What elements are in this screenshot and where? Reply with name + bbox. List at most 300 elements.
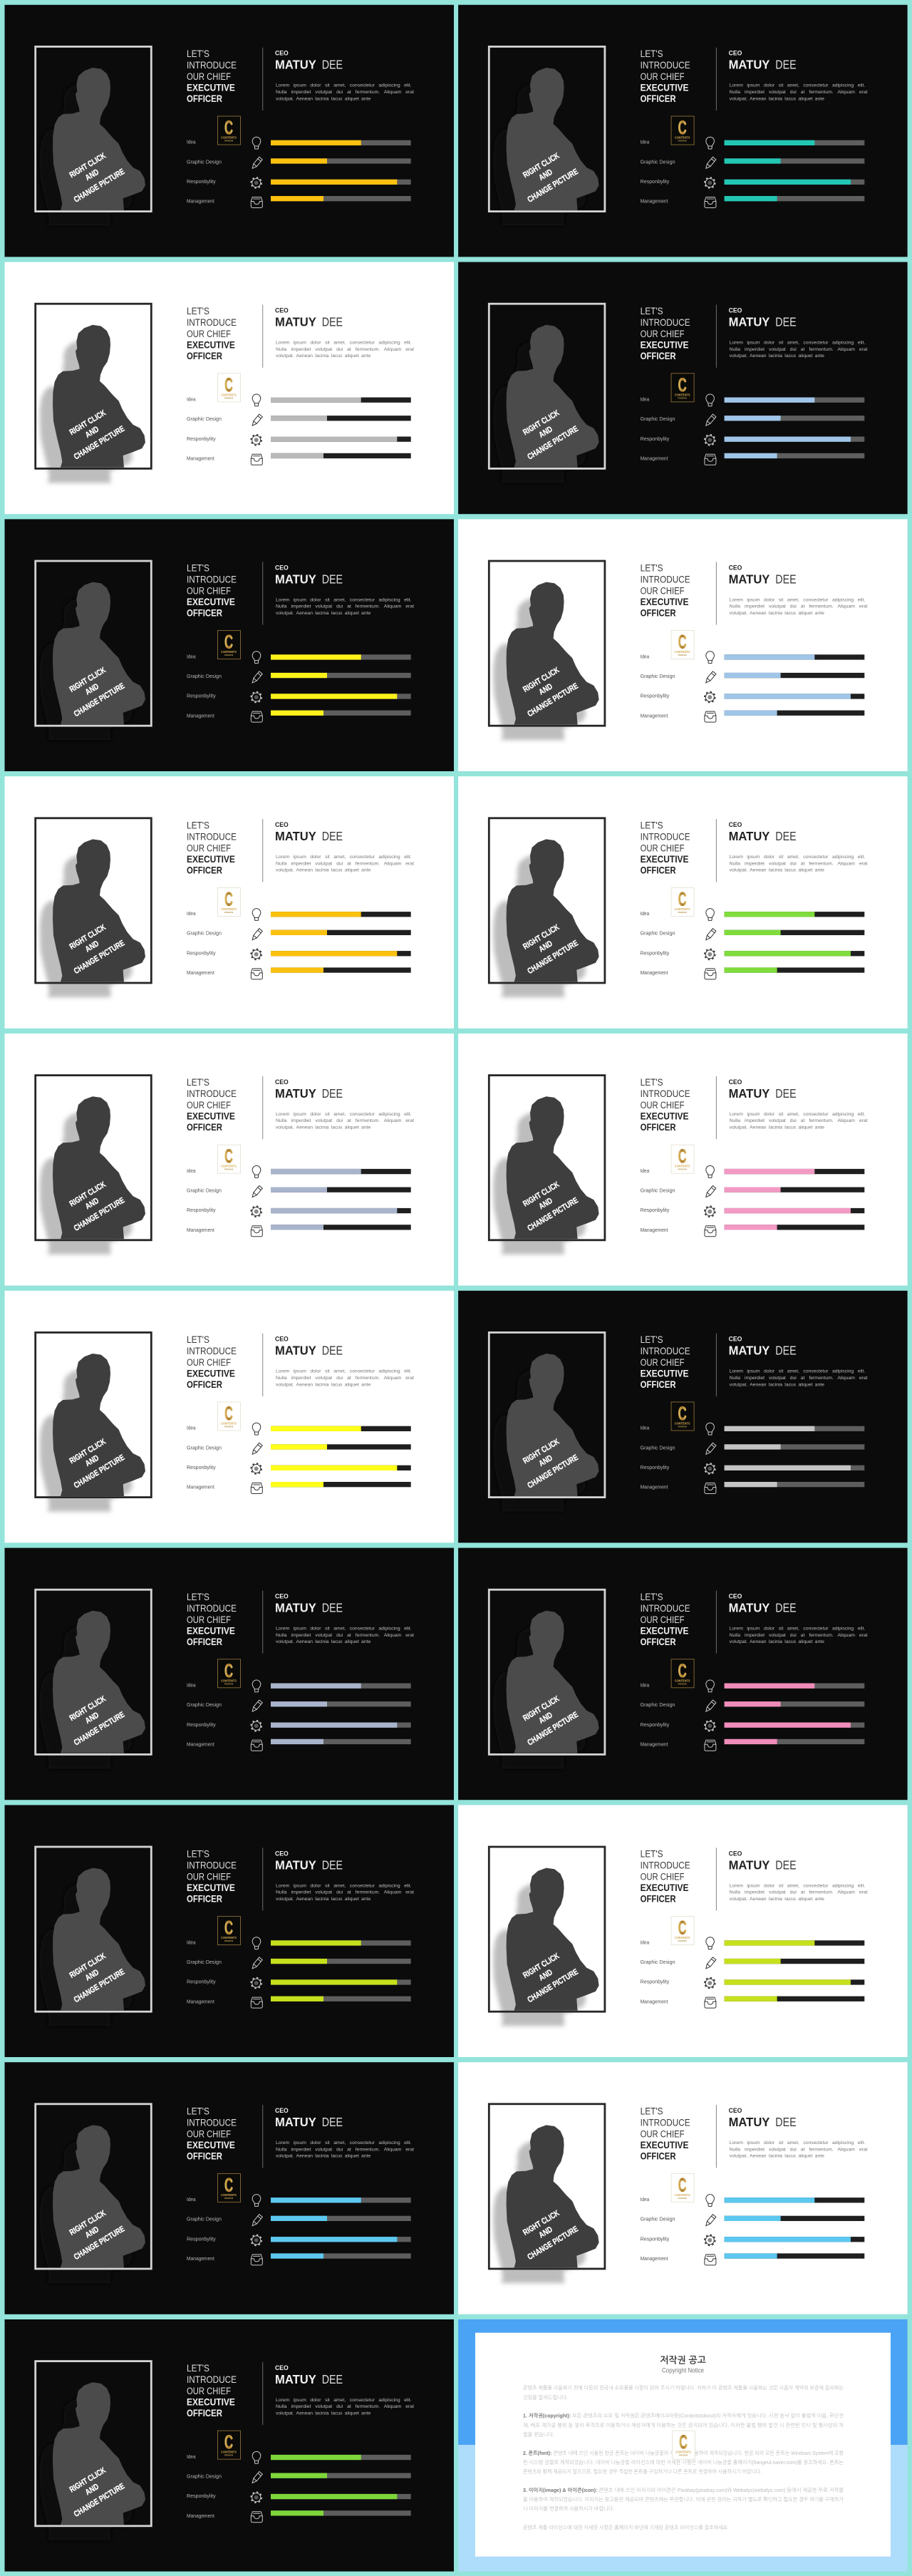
- name block: CEO: [275, 821, 289, 828]
- photo frame with silhouette: AND: [538, 2225, 554, 2240]
- bio text: Lorem ipsum dolor sit amet, consectetur adipiscing elit.: [730, 1112, 865, 1117]
- heading: EXECUTIVE: [641, 1111, 689, 1122]
- skill labels: Graphic Design: [187, 930, 222, 937]
- logo badge: [218, 1402, 241, 1431]
- logo badge: CONTENTS: [675, 2193, 690, 2197]
- skill labels: Idea: [187, 2198, 196, 2203]
- heading: OFFICER: [641, 351, 676, 361]
- bio text: Lorem ipsum dolor sit amet, consectetur adipiscing elit.: [730, 855, 865, 860]
- heading: OUR CHIEF: [641, 329, 685, 339]
- name block: [275, 1335, 343, 1358]
- bio text: Nulla imperdiet volutpat dui at fermentum. Aliquam erat: [276, 1890, 414, 1895]
- photo frame with silhouette: AND: [84, 168, 101, 182]
- logo badge: [671, 1659, 694, 1688]
- photo frame with silhouette: [36, 818, 151, 997]
- heading: INTRODUCE: [641, 60, 690, 71]
- name block: [275, 821, 343, 844]
- name block: DEE: [322, 315, 343, 329]
- bio text: volutpat. Aenean lacinia lacus aliquet ante: [730, 2154, 824, 2159]
- skill labels: Management: [187, 1227, 214, 1233]
- photo frame with silhouette: AND: [538, 1197, 554, 1212]
- heading: INTRODUCE: [641, 2118, 690, 2128]
- photo frame with silhouette: [36, 1332, 151, 1512]
- logo badge: [218, 887, 241, 916]
- logo badge: [671, 1145, 694, 1173]
- logo badge: [218, 631, 241, 659]
- skill labels: [187, 912, 222, 976]
- logo badge: [671, 1917, 694, 1945]
- skill labels: [187, 2198, 222, 2262]
- skill bars: [725, 398, 864, 458]
- logo badge: [218, 116, 241, 145]
- skill labels: Management: [187, 2256, 214, 2262]
- photo frame with silhouette: AND: [84, 682, 101, 697]
- skill bars: [725, 1426, 864, 1487]
- photo frame with silhouette: CHANGE PICTURE: [73, 1196, 126, 1233]
- bio text: volutpat. Aenean lacinia lacus aliquet ante: [730, 1897, 824, 1902]
- copyright body text: 1. 저작권(copyright): 모든 콘텐츠의 소유 및 저작권은 콘텐츠메이크아웃(Contentstokout)의 저작자에게 있습니다. 사전 승낙 없이 불법적 이용, 무단전: [523, 2412, 844, 2419]
- skill labels: Graphic Design: [641, 673, 675, 679]
- logo badge: CONTENTS: [221, 907, 237, 911]
- photo frame with silhouette: [36, 1590, 151, 1768]
- logo badge: CONTENTS: [221, 2193, 237, 2197]
- name block: MATUY: [275, 1858, 316, 1872]
- skill labels: Management: [641, 713, 668, 718]
- photo frame with silhouette: [489, 2104, 605, 2283]
- skill labels: [187, 1940, 222, 2004]
- logo badge: PREMIUM: [678, 140, 687, 143]
- skill labels: Graphic Design: [641, 158, 675, 165]
- name block: DEE: [322, 2116, 343, 2130]
- logo badge: PREMIUM: [224, 1939, 233, 1942]
- logo badge: CONTENTS: [675, 393, 690, 396]
- heading: EXECUTIVE: [187, 2396, 235, 2408]
- photo frame with silhouette: [489, 818, 605, 997]
- heading: INTRODUCE: [187, 832, 237, 843]
- name block: DEE: [322, 1344, 343, 1358]
- bio text: [730, 1627, 868, 1644]
- logo badge: C: [224, 1917, 233, 1939]
- skill labels: [187, 140, 222, 205]
- skill labels: [641, 397, 675, 462]
- photo frame with silhouette: AND: [84, 1711, 101, 1726]
- bio text: Lorem ipsum dolor sit amet, consectetur adipiscing elit.: [730, 1627, 865, 1632]
- name block: [729, 1850, 797, 1872]
- bio text: volutpat. Aenean lacinia lacus aliquet ante: [730, 868, 824, 873]
- heading: LET'S: [641, 1592, 663, 1602]
- photo frame with silhouette: CHANGE PICTURE: [527, 939, 580, 976]
- bio text: Nulla imperdiet volutpat dui at fermentum. Aliquam erat: [276, 2404, 414, 2409]
- skill labels: Responbylity: [641, 1207, 670, 1213]
- logo badge: PREMIUM: [224, 654, 233, 656]
- skill labels: Responbylity: [641, 692, 670, 699]
- logo badge: PREMIUM: [678, 2197, 687, 2200]
- bio text: Lorem ipsum dolor sit amet, consectetur adipiscing elit.: [276, 83, 412, 88]
- name block: MATUY: [275, 1343, 316, 1358]
- heading: [641, 1078, 690, 1133]
- heading: OUR CHIEF: [187, 2128, 231, 2140]
- photo frame with silhouette: CHANGE PICTURE: [73, 2225, 126, 2262]
- skill icons: [705, 909, 716, 979]
- logo badge: CONTENTS: [221, 1936, 237, 1939]
- skill labels: [641, 1940, 675, 2004]
- photo frame with silhouette: AND: [538, 1454, 554, 1468]
- heading: OUR CHIEF: [187, 1100, 231, 1111]
- heading: [187, 1849, 237, 1905]
- logo badge: [673, 2431, 695, 2459]
- panel: slide 19, dark, green bars: [4, 2319, 454, 2572]
- photo frame with silhouette: RIGHT CLICK: [68, 923, 108, 952]
- name block: [275, 564, 343, 587]
- skill bars: [725, 140, 864, 201]
- bio text: Nulla imperdiet volutpat dui at fermentum. Aliquam erat: [730, 604, 868, 609]
- name block: [729, 306, 797, 329]
- heading: LET'S: [187, 820, 209, 831]
- heading: OFFICER: [187, 1379, 222, 1390]
- heading: LET'S: [641, 306, 663, 316]
- heading: INTRODUCE: [187, 317, 237, 328]
- logo badge: [218, 373, 241, 402]
- panel: slide 4, dark, pale blue bars: [458, 262, 908, 514]
- heading: INTRODUCE: [641, 1346, 690, 1356]
- panel: slide 2, dark, teal bars: [458, 5, 908, 257]
- photo frame with silhouette: RIGHT CLICK: [522, 923, 561, 952]
- logo badge: C: [224, 2431, 233, 2453]
- heading: OUR CHIEF: [641, 1357, 685, 1368]
- name block: CEO: [729, 49, 742, 57]
- name block: [729, 49, 797, 72]
- skill icons: [251, 909, 262, 979]
- heading: LET'S: [187, 2364, 209, 2374]
- heading: [187, 306, 237, 361]
- heading: LET'S: [641, 820, 663, 831]
- heading: INTRODUCE: [641, 832, 690, 843]
- bio text: [730, 1369, 868, 1387]
- heading: OFFICER: [641, 93, 676, 104]
- bio text: Lorem ipsum dolor sit amet, consectetur adipiscing elit.: [276, 1883, 412, 1888]
- logo badge: PREMIUM: [224, 1168, 233, 1171]
- skill labels: Graphic Design: [187, 158, 222, 165]
- bio text: Lorem ipsum dolor sit amet, consectetur adipiscing elit.: [730, 597, 865, 602]
- bio text: Lorem ipsum dolor sit amet, consectetur adipiscing elit.: [276, 2398, 412, 2403]
- logo badge: CONTENTS: [221, 1421, 237, 1426]
- name block: CEO: [729, 1335, 742, 1343]
- bio text: Nulla imperdiet volutpat dui at fermentum. Aliquam erat: [730, 1118, 868, 1123]
- photo frame with silhouette: [36, 1076, 151, 1254]
- panel: slide 3, light, grey bars: [4, 262, 454, 514]
- name block: MATUY: [275, 572, 316, 586]
- name block: DEE: [322, 58, 343, 72]
- heading: [187, 48, 237, 104]
- heading: OFFICER: [641, 1894, 676, 1905]
- panel: slide 10, light, pink bars: [458, 1034, 908, 1286]
- heading: LET'S: [641, 2106, 663, 2117]
- heading: EXECUTIVE: [187, 1368, 235, 1379]
- name block: MATUY: [729, 829, 770, 843]
- photo frame with silhouette: RIGHT CLICK: [68, 1694, 108, 1723]
- logo badge: PREMIUM: [224, 2454, 233, 2457]
- bio text: Nulla imperdiet volutpat dui at fermentum. Aliquam erat: [730, 1633, 868, 1638]
- bio text: volutpat. Aenean lacinia lacus aliquet ante: [276, 354, 371, 359]
- name block: CEO: [729, 1592, 742, 1600]
- bio text: volutpat. Aenean lacinia lacus aliquet ante: [730, 611, 824, 616]
- skill bars: [725, 912, 864, 973]
- heading: OUR CHIEF: [641, 843, 685, 854]
- bio text: Nulla imperdiet volutpat dui at fermentum. Aliquam erat: [276, 1633, 414, 1638]
- logo badge: PREMIUM: [224, 396, 233, 399]
- heading: LET'S: [187, 2106, 209, 2117]
- skill labels: Management: [641, 1227, 668, 1233]
- heading: LET'S: [641, 1078, 663, 1088]
- skill icons: [705, 394, 716, 465]
- bio text: [276, 1112, 414, 1130]
- logo badge: PREMIUM: [678, 911, 687, 914]
- skill labels: [187, 397, 222, 462]
- logo badge: [218, 2431, 241, 2459]
- heading: OUR CHIEF: [641, 2128, 685, 2140]
- name block: DEE: [775, 1086, 797, 1101]
- skill icons: [251, 1680, 262, 1751]
- logo badge: [218, 2173, 241, 2202]
- photo frame with silhouette: RIGHT CLICK: [68, 1438, 108, 1466]
- heading: [641, 1849, 690, 1905]
- name block: CEO: [729, 306, 742, 314]
- logo badge: CONTENTS: [675, 1421, 690, 1426]
- bio text: volutpat. Aenean lacinia lacus aliquet ante: [276, 2411, 371, 2416]
- name block: DEE: [775, 58, 797, 72]
- name block: CEO: [729, 1078, 742, 1086]
- bio text: Nulla imperdiet volutpat dui at fermentum. Aliquam erat: [730, 1376, 868, 1381]
- panel: slide 18, light, sky blue bars: [458, 2062, 908, 2314]
- heading: OUR CHIEF: [187, 2386, 231, 2396]
- bio text: [276, 341, 414, 359]
- name block: CEO: [729, 2107, 742, 2114]
- bio text: volutpat. Aenean lacinia lacus aliquet ante: [276, 1382, 371, 1387]
- skill labels: Management: [641, 970, 668, 976]
- logo badge: C: [224, 117, 233, 138]
- bio text: Lorem ipsum dolor sit amet, consectetur adipiscing elit.: [276, 1369, 412, 1374]
- skill bars: [725, 1940, 864, 2001]
- skill labels: Responbylity: [641, 1464, 670, 1470]
- bio text: Lorem ipsum dolor sit amet, consectetur adipiscing elit.: [276, 2140, 412, 2145]
- skill labels: Graphic Design: [641, 930, 675, 937]
- photo frame with silhouette: [489, 1847, 605, 2026]
- name block: CEO: [275, 49, 289, 57]
- name block: DEE: [775, 1344, 797, 1358]
- skill bars: [271, 140, 411, 201]
- skill labels: Management: [641, 455, 668, 462]
- name block: CEO: [275, 1078, 289, 1086]
- photo frame with silhouette: CHANGE PICTURE: [527, 1453, 580, 1490]
- heading: OUR CHIEF: [187, 586, 231, 597]
- panel: slide 14, dark, pink bars: [458, 1548, 908, 1800]
- logo badge: C: [678, 1403, 687, 1424]
- name block: MATUY: [275, 829, 316, 843]
- skill labels: [187, 2455, 222, 2519]
- skill labels: Idea: [641, 140, 649, 145]
- name block: [275, 1078, 343, 1101]
- logo badge: PREMIUM: [678, 1682, 687, 1685]
- heading: OFFICER: [187, 2408, 222, 2418]
- panel: slide 5, dark, yellow bars: [4, 519, 454, 771]
- copyright title: 저작권 공고: [660, 2355, 706, 2366]
- skill labels: Graphic Design: [187, 673, 222, 679]
- bio text: [730, 1883, 868, 1902]
- name block: DEE: [775, 2116, 797, 2130]
- heading: [641, 563, 690, 619]
- name block: MATUY: [729, 1343, 770, 1358]
- name block: CEO: [275, 306, 289, 314]
- copyright body text: 된 시스템 글꼴로 제작되었습니다. 네이버 나눔글꼴 라이선스에 대한 자세한 사항은 네이버 나눔글꼴 홈페이지(hangeul.naver.com)를 참조하세요. 폰트는: [523, 2459, 844, 2466]
- logo badge: C: [224, 1403, 233, 1424]
- bio text: [276, 1883, 414, 1902]
- photo frame with silhouette: [489, 561, 605, 740]
- bio text: volutpat. Aenean lacinia lacus aliquet ante: [276, 1897, 371, 1902]
- bio text: [730, 597, 868, 616]
- skill labels: [641, 1683, 675, 1748]
- skill labels: Idea: [641, 1683, 649, 1689]
- skill labels: Management: [641, 198, 668, 205]
- heading: INTRODUCE: [187, 1089, 237, 1099]
- skill icons: [251, 137, 262, 208]
- skill labels: Graphic Design: [187, 1701, 222, 1708]
- heading: LET'S: [641, 48, 663, 59]
- photo frame with silhouette: RIGHT CLICK: [68, 1180, 108, 1209]
- heading: INTRODUCE: [187, 575, 237, 585]
- bio text: [276, 2398, 414, 2416]
- photo frame with silhouette: AND: [84, 939, 101, 954]
- bio text: volutpat. Aenean lacinia lacus aliquet ante: [276, 1639, 371, 1644]
- name block: DEE: [775, 1858, 797, 1872]
- bio text: [730, 2140, 868, 2159]
- skill icons: [705, 137, 716, 208]
- photo frame with silhouette: RIGHT CLICK: [522, 1180, 561, 1209]
- skill labels: Graphic Design: [641, 1444, 675, 1451]
- name block: CEO: [275, 1850, 289, 1857]
- photo frame with silhouette: RIGHT CLICK: [68, 2466, 108, 2495]
- photo frame with silhouette: CHANGE PICTURE: [527, 682, 580, 719]
- heading: EXECUTIVE: [187, 1111, 235, 1122]
- bio text: Lorem ipsum dolor sit amet, consectetur adipiscing elit.: [276, 597, 412, 602]
- skill labels: Idea: [187, 140, 196, 145]
- name block: CEO: [729, 1850, 742, 1857]
- skill bars: [271, 1169, 411, 1230]
- heading: OFFICER: [641, 1122, 676, 1133]
- skill labels: Responbylity: [187, 692, 216, 699]
- name block: DEE: [775, 830, 797, 844]
- heading: OUR CHIEF: [641, 1614, 685, 1625]
- logo badge: [218, 1917, 241, 1945]
- skill labels: Responbylity: [187, 2235, 216, 2242]
- panel: slide 13, dark, blue-grey bars: [4, 1548, 454, 1800]
- logo badge: [671, 1402, 694, 1431]
- bio text: [730, 1112, 868, 1130]
- heading: INTRODUCE: [641, 575, 690, 585]
- panel: slide 16, light, lime bars: [458, 1805, 908, 2057]
- photo frame with silhouette: [36, 46, 151, 226]
- skill bars: [271, 1940, 411, 2001]
- heading: INTRODUCE: [641, 1860, 690, 1871]
- photo frame with silhouette: AND: [538, 1968, 554, 1983]
- name block: CEO: [275, 564, 289, 571]
- bio text: Lorem ipsum dolor sit amet, consectetur adipiscing elit.: [730, 340, 865, 345]
- skill bars: [725, 654, 864, 716]
- logo badge: C: [224, 1660, 233, 1681]
- heading: EXECUTIVE: [641, 596, 689, 607]
- heading: EXECUTIVE: [187, 1882, 235, 1893]
- logo badge: C: [678, 888, 687, 910]
- bio text: [276, 855, 414, 873]
- photo frame with silhouette: [489, 1590, 605, 1768]
- logo badge: PREMIUM: [678, 654, 687, 656]
- bio text: volutpat. Aenean lacinia lacus aliquet ante: [276, 1125, 371, 1130]
- name block: CEO: [729, 821, 742, 828]
- skill icons: [705, 1937, 716, 2008]
- skill bars: [271, 912, 411, 973]
- skill labels: Idea: [641, 2198, 649, 2203]
- heading: LET'S: [641, 1849, 663, 1860]
- heading: INTRODUCE: [187, 1346, 237, 1356]
- bio text: [730, 855, 868, 873]
- logo badge: PREMIUM: [678, 1426, 687, 1428]
- name block: [275, 1850, 343, 1872]
- photo frame with silhouette: CHANGE PICTURE: [73, 1453, 126, 1490]
- heading: EXECUTIVE: [641, 1625, 689, 1636]
- bio text: Nulla imperdiet volutpat dui at fermentum. Aliquam erat: [276, 90, 414, 95]
- heading: OUR CHIEF: [187, 1614, 231, 1625]
- photo frame with silhouette: CHANGE PICTURE: [527, 425, 580, 462]
- bio text: volutpat. Aenean lacinia lacus aliquet ante: [276, 868, 371, 873]
- panel: slide 6, light, pale blue bars: [458, 519, 908, 771]
- name block: MATUY: [275, 2115, 316, 2129]
- logo badge: [671, 116, 694, 145]
- heading: INTRODUCE: [187, 2375, 237, 2385]
- name block: MATUY: [275, 314, 316, 329]
- bio text: volutpat. Aenean lacinia lacus aliquet ante: [276, 96, 371, 101]
- heading: INTRODUCE: [187, 1860, 237, 1871]
- heading: [641, 1592, 690, 1647]
- skill bars: [271, 2198, 411, 2259]
- panel: slide 15, dark, lime bars: [4, 1805, 454, 2057]
- photo frame with silhouette: RIGHT CLICK: [68, 408, 108, 437]
- heading: INTRODUCE: [641, 1089, 690, 1099]
- panel: slide 8, light, green bars: [458, 776, 908, 1029]
- skill labels: Graphic Design: [187, 2473, 222, 2480]
- bio text: Nulla imperdiet volutpat dui at fermentum. Aliquam erat: [276, 604, 414, 609]
- logo badge: C: [678, 117, 687, 138]
- heading: OFFICER: [187, 1122, 222, 1133]
- skill labels: [187, 1426, 222, 1490]
- skill labels: Management: [187, 1999, 214, 2004]
- logo badge: C: [678, 1917, 687, 1939]
- logo badge: PREMIUM: [224, 1682, 233, 1685]
- logo badge: [671, 631, 694, 659]
- heading: INTRODUCE: [187, 2118, 237, 2128]
- skill labels: Graphic Design: [187, 2216, 222, 2222]
- heading: [641, 306, 690, 361]
- bio text: volutpat. Aenean lacinia lacus aliquet ante: [276, 611, 371, 616]
- panel: slide 17, dark, sky blue bars: [4, 2062, 454, 2314]
- bio text: volutpat. Aenean lacinia lacus aliquet ante: [730, 1639, 824, 1644]
- skill labels: Idea: [187, 912, 196, 917]
- skill labels: Idea: [641, 1940, 649, 1945]
- photo frame with silhouette: RIGHT CLICK: [68, 1952, 108, 1980]
- photo frame with silhouette: [36, 561, 151, 740]
- bio text: [276, 597, 414, 616]
- heading: [187, 1334, 237, 1390]
- heading: OFFICER: [641, 1637, 676, 1647]
- skill labels: Idea: [187, 654, 196, 659]
